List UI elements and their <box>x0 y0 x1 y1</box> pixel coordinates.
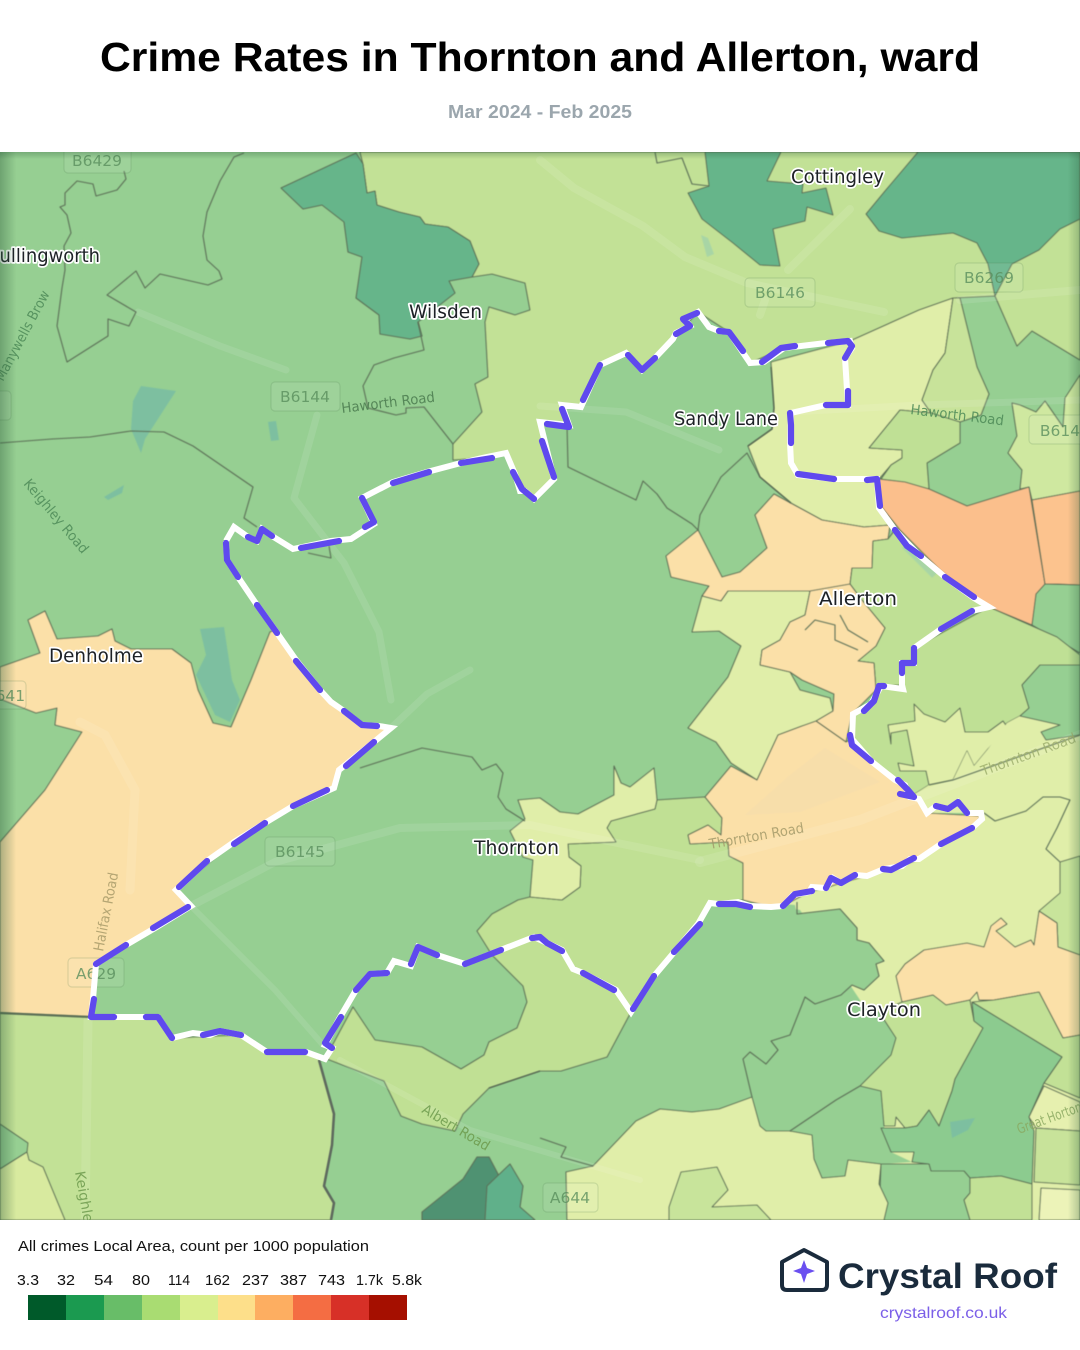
road name labels: Keighley <box>71 1170 97 1232</box>
road number shields: B6144 <box>280 388 330 406</box>
region: highest crime orange area <box>879 479 1045 625</box>
region: Thornton pale centre <box>510 766 657 900</box>
region: pale south area <box>566 1097 888 1220</box>
region: Wilsden low-crime area <box>281 153 479 339</box>
legend title: All crimes Local Area, count per 1000 population <box>18 1239 369 1255</box>
region: cream Clayton north area <box>896 911 1080 1038</box>
region: top right low-crime area <box>866 152 1080 296</box>
legend scale labels: 3.3 <box>17 1273 39 1289</box>
place name labels: Denholme <box>49 645 143 667</box>
title: Crime Rates in Thornton and Allerton, ward <box>100 34 980 80</box>
road name labels <box>0 288 1080 1232</box>
region: south-west light green area <box>0 1013 334 1220</box>
region: cream area Allerton centre <box>760 584 885 742</box>
region: cream area at Allerton <box>666 494 890 601</box>
region: light green central south of Thornton <box>325 797 743 1131</box>
legend scale labels: 5.8k <box>392 1273 423 1289</box>
region: light green east of Allerton <box>850 530 989 690</box>
legend scale labels: 387 <box>280 1273 307 1289</box>
region: south-east cream triangle <box>688 721 981 907</box>
legend scale labels: 32 <box>57 1273 75 1289</box>
road number shields: B6145 <box>275 843 325 861</box>
subtitle: date range: Mar 2024 - Feb 2025 <box>448 102 632 122</box>
legend scale labels <box>17 1273 423 1289</box>
legend colour scale <box>28 1295 407 1320</box>
road network <box>80 160 1080 1220</box>
road name labels: Haworth Road <box>341 390 436 417</box>
region: low crime Great Horton area <box>881 1002 1062 1184</box>
ward boundary: purple dashes <box>91 313 974 1052</box>
road number shields: B614 <box>1040 422 1080 440</box>
place name labels: Wilsden <box>409 301 482 323</box>
region: Denholme cream area <box>0 611 391 1017</box>
road number shields: A644 <box>550 1189 590 1207</box>
region: mid green south of ward <box>786 904 912 1184</box>
region: northern light green area <box>360 152 1080 499</box>
road number shields <box>0 144 1080 1212</box>
boundary lines <box>0 152 1080 1220</box>
place name labels: Cottingley <box>791 166 884 188</box>
place name labels: Allerton <box>819 588 897 610</box>
water features <box>104 235 975 1138</box>
map edge vignette <box>0 152 1080 1220</box>
logo wordmark: Crystal Roof <box>838 1257 1057 1296</box>
road name labels: Halifax Road <box>91 871 122 953</box>
legend scale labels: 743 <box>318 1273 345 1289</box>
road name labels: Thornton Road <box>707 821 805 853</box>
ward boundary: white base line <box>91 312 989 1059</box>
road number shields: A629 <box>76 965 116 983</box>
place name labels: Sandy Lane <box>674 408 778 430</box>
legend scale labels: 54 <box>94 1273 113 1289</box>
legend scale labels: 80 <box>132 1273 150 1289</box>
road name labels: Haworth Road <box>910 402 1005 429</box>
region: light green tile east <box>922 298 989 422</box>
icon: house with star <box>782 1250 827 1290</box>
choropleth regions <box>0 152 1080 1220</box>
legend scale labels: 237 <box>242 1273 269 1289</box>
place name labels: Thornton <box>473 837 559 859</box>
road name labels: Albert Road <box>419 1102 492 1155</box>
road name labels: Keighley Road <box>20 476 91 557</box>
legend scale labels: 114 <box>168 1273 190 1289</box>
region: Cottingley low-crime area <box>688 152 833 266</box>
region: pale south-east area <box>788 716 1080 1220</box>
region: pale area under Allerton <box>688 591 835 780</box>
legend <box>17 1239 423 1320</box>
region: pale area north of Allerton <box>748 298 953 527</box>
road number shields: B6269 <box>964 269 1014 287</box>
legend scale labels: 162 <box>205 1273 230 1289</box>
road name labels: Thornton Road <box>978 731 1078 780</box>
region: light green Clayton south <box>860 995 983 1128</box>
legend scale labels: 1.7k <box>356 1273 384 1289</box>
place name labels <box>0 166 921 1021</box>
road number shields: B6429 <box>72 152 122 170</box>
website url: crystalroof.co.uk <box>880 1305 1008 1322</box>
road number shields: B6146 <box>755 284 805 302</box>
region: darkest green <box>422 1157 498 1220</box>
place name labels: Clayton <box>847 999 921 1021</box>
logo: Crystal Roof <box>782 1250 1057 1322</box>
region: light green east of ward <box>852 607 1080 797</box>
